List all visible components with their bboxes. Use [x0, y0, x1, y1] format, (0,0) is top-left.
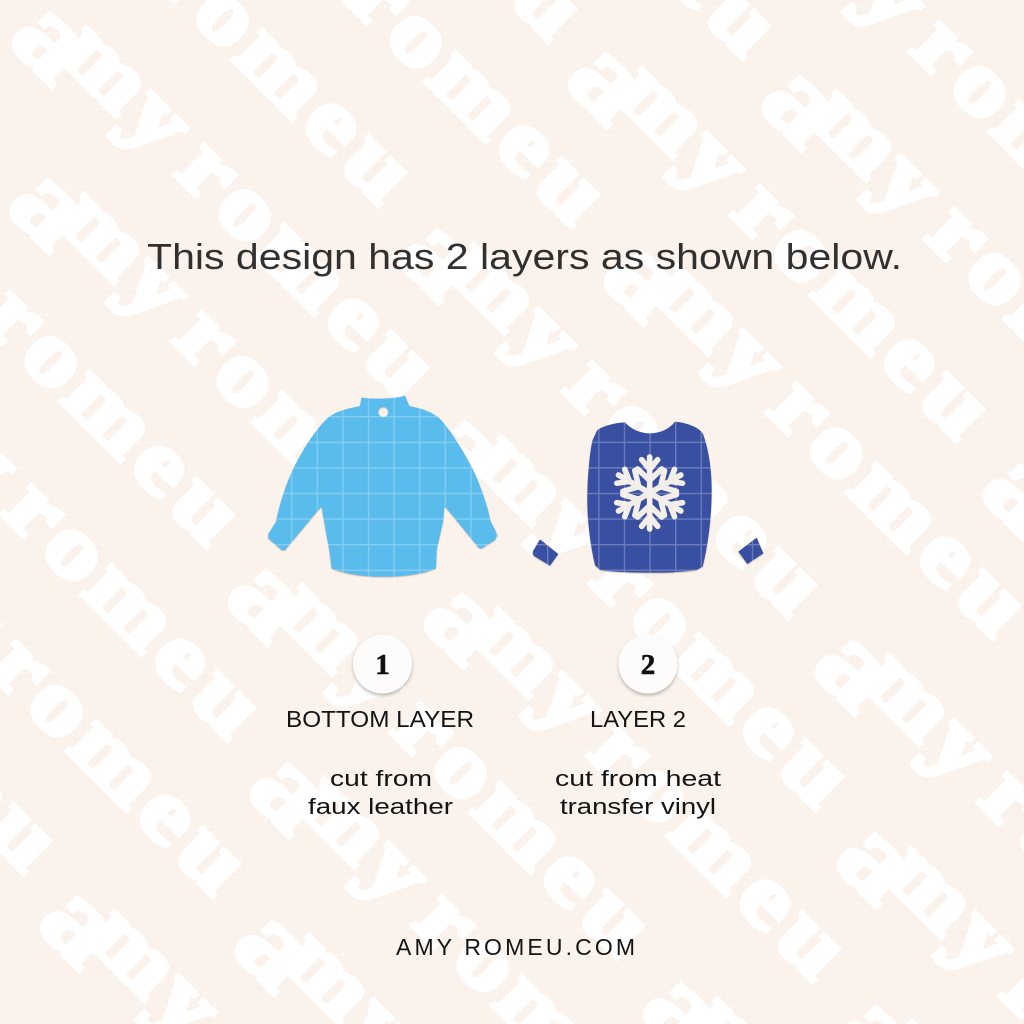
badge: number 1: 1: [375, 649, 390, 681]
watermark pattern: amy romeu: a: [404, 381, 537, 514]
heading: This design has 2 layers as shown below.: [147, 236, 902, 277]
text: cut from faux leather: [308, 766, 454, 819]
icon: snowflake: [612, 457, 687, 529]
watermark pattern: amy romeu: my romeu: [39, 166, 456, 583]
icon: left cuff: [533, 539, 558, 566]
badge: number 2: 2: [641, 649, 655, 681]
watermark pattern: amy romeu: a: [401, 553, 534, 686]
badge: number 2: [618, 634, 678, 694]
watermark pattern: amy romeu: my romeu: [456, 408, 873, 825]
watermark pattern: amy romeu: a: [739, 36, 872, 169]
footer: website: AMY ROMEU.COM: [396, 934, 635, 960]
text: cut from heat transfer vinyl: transfer vinyl: [560, 794, 716, 819]
watermark pattern: amy romeu: my romeu: [257, 557, 674, 974]
watermark pattern: amy romeu: my romeu: [597, 40, 1014, 457]
icon: dark blue sweater body, layer 2: [587, 422, 712, 573]
watermark pattern: amy romeu: my romeu: [429, 216, 846, 633]
text: cut from heat transfer vinyl: [555, 766, 722, 819]
icon: right cuff: [738, 538, 763, 564]
icon: light blue sweater, bottom layer: [268, 396, 498, 577]
watermark pattern: amy romeu: a: [227, 723, 360, 856]
label: layer 2: LAYER 2: [590, 706, 686, 732]
watermark pattern: amy romeu: a: [17, 856, 150, 989]
watermark pattern: amy romeu: a: [377, 189, 510, 322]
text: cut from faux leather: cut from: [330, 766, 432, 791]
watermark pattern: amy romeu: a: [792, 600, 925, 733]
watermark pattern: amy romeu: a: [545, 13, 678, 146]
watermark pattern: amy romeu: a: [212, 880, 345, 1013]
watermark pattern: amy romeu: a: [205, 530, 338, 663]
watermark pattern: amy romeu: my romeu: [41, 0, 458, 416]
watermark pattern: amy romeu: a: [581, 210, 714, 343]
badge: number 1: [353, 634, 412, 694]
text: cut from heat transfer vinyl: cut from heat: [555, 766, 722, 791]
watermark pattern: amy romeu: my romeu: [453, 580, 870, 997]
text: cut from faux leather: faux leather: [308, 794, 454, 819]
label: bottom layer: BOTTOM LAYER: [286, 706, 474, 732]
watermark pattern: amy romeu: a: [814, 793, 947, 926]
